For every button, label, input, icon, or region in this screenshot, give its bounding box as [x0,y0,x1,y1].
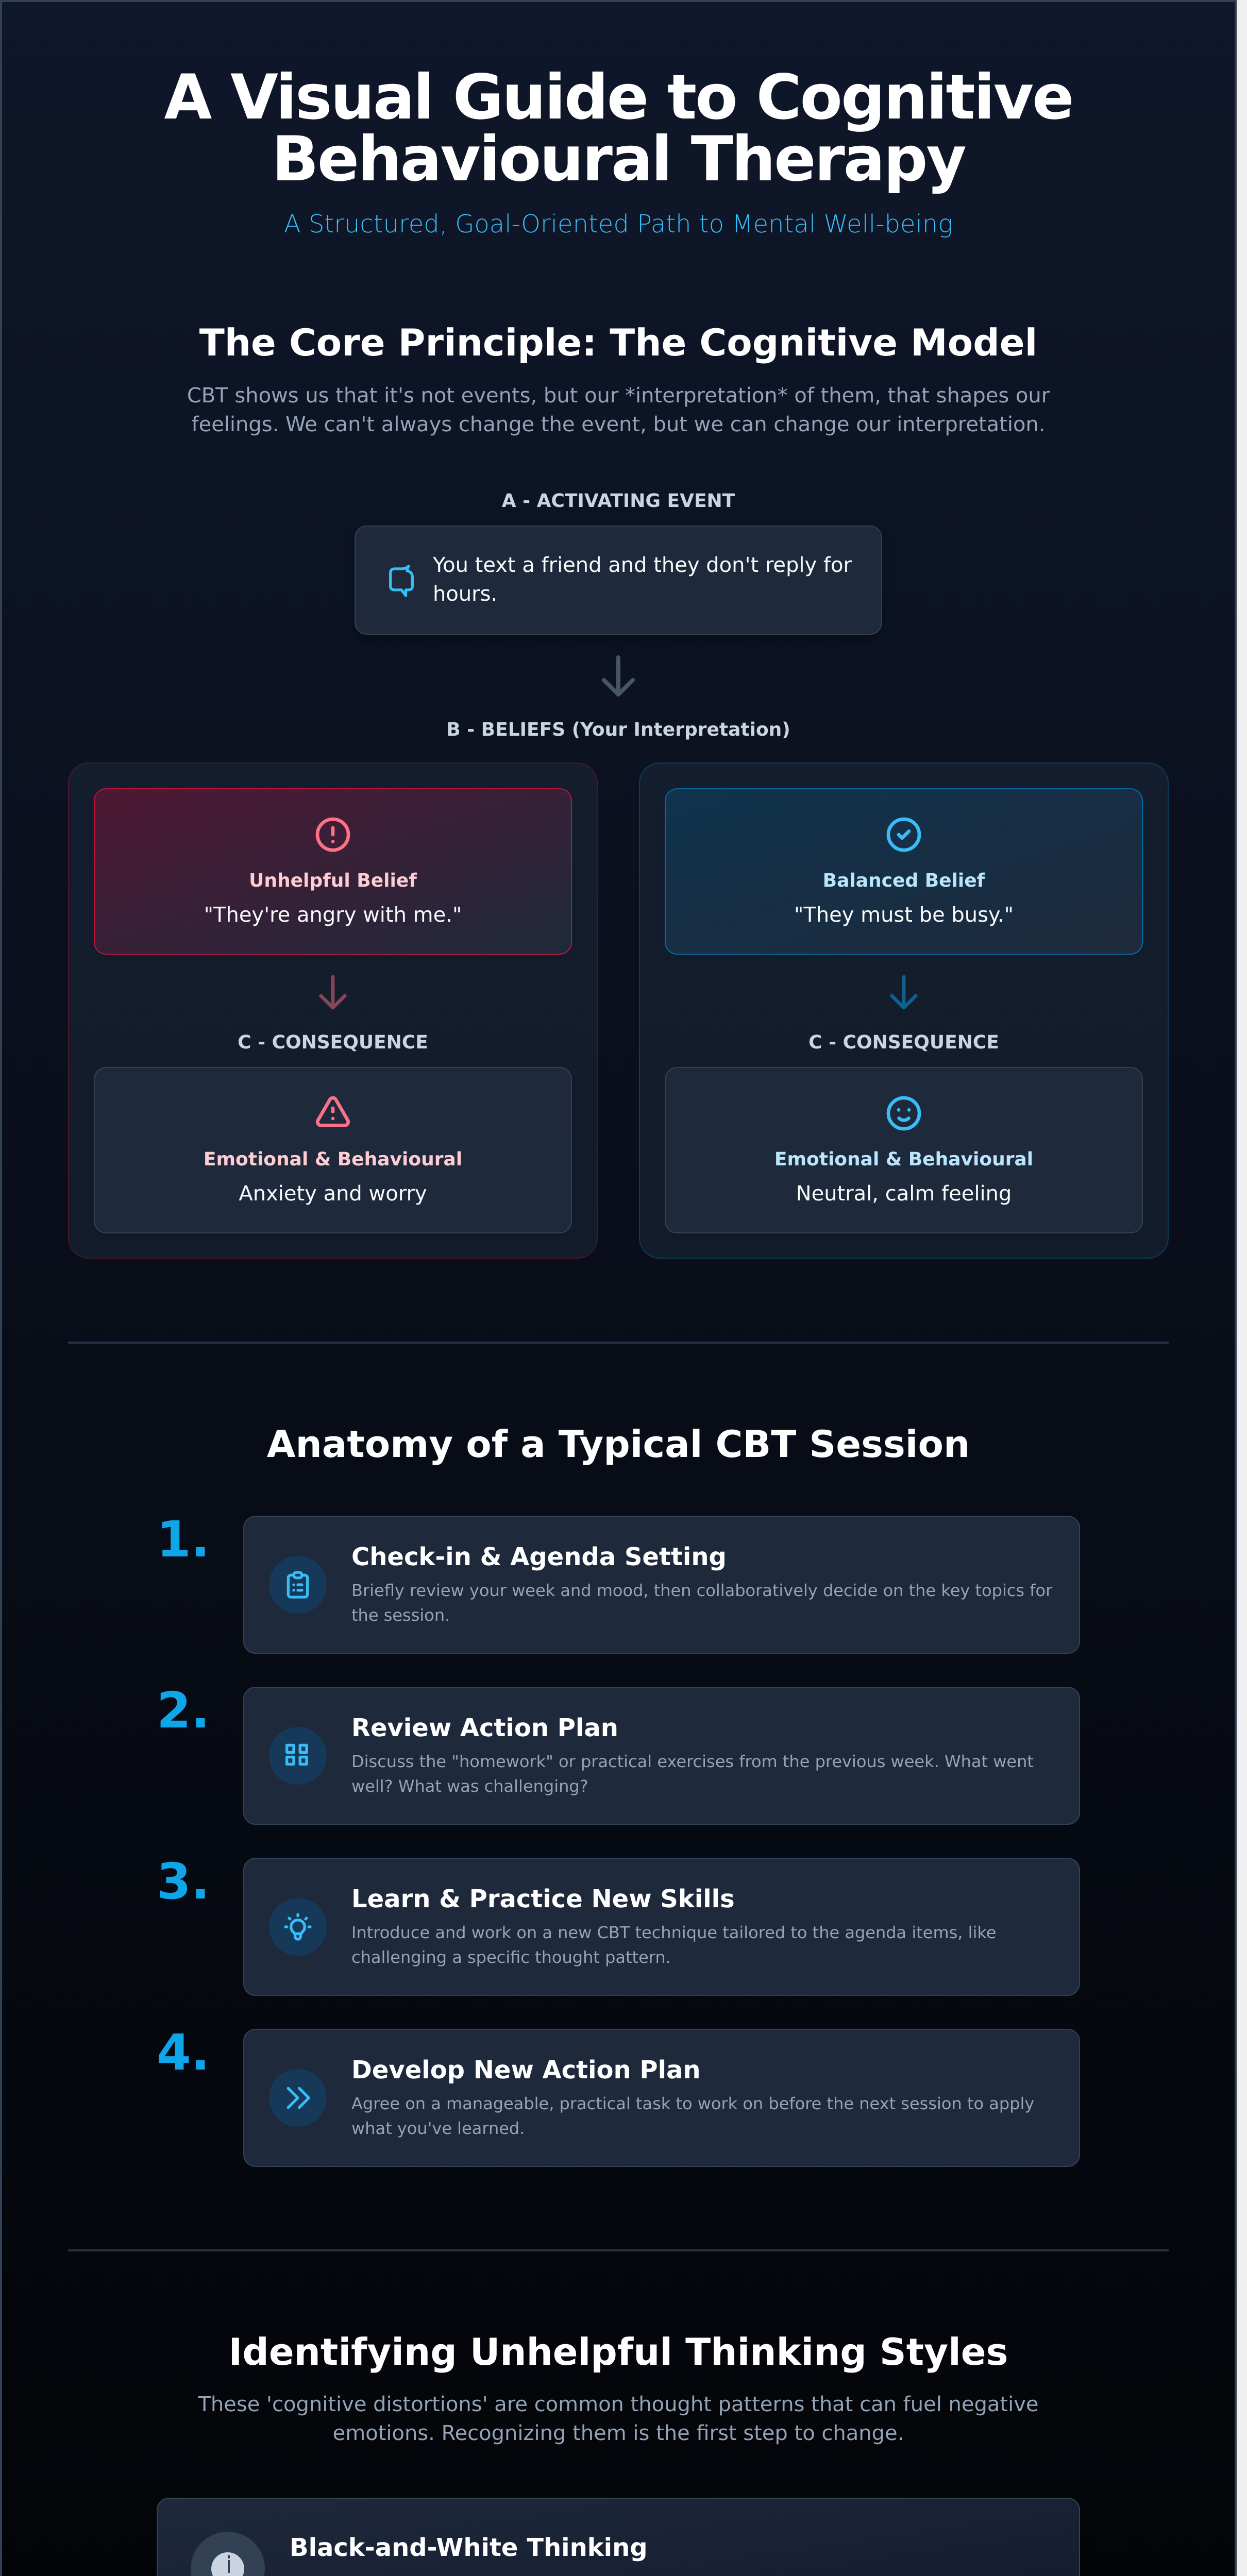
panel: unhelpful path [68,762,598,1259]
step description: challenging a specific thought pattern. [351,1947,671,1967]
card: black-and-white thinking [157,2498,1080,2576]
step title: Develop New Action Plan [351,2056,701,2084]
step description: well? What was challenging? [351,1776,588,1796]
icon: light bulb [269,1898,327,1956]
heading: thinking styles: Identifying Unhelpful Thinking Styles [229,2330,1008,2374]
icon: check circle [886,817,921,852]
step number: 3. [157,1853,210,1910]
consequence heading: Emotional & Behavioural [774,1149,1033,1170]
step description: Briefly review your week and mood, then collaboratively decide on the key topics for [351,1581,1052,1600]
intro text: thinking styles [2,2390,1235,2448]
icon: exclamation circle [315,817,350,852]
title: Behavioural Therapy [272,124,965,195]
intro text: thinking styles: emotions. Recognizing them is the first step to change. [333,2421,904,2445]
step card [243,1858,1080,1996]
consequence box [94,1067,572,1233]
step description [351,1923,996,1967]
step description [351,1581,1052,1625]
event text: You text a friend and they don't reply for [433,553,852,577]
step 3 [157,1853,1080,1996]
intro text: cognitive model: CBT shows us that it's not events, but our *interpretation* of them, that shapes our [187,384,1050,408]
card title: Black-and-White Thinking [290,2533,648,2562]
belief heading: Unhelpful Belief [249,870,417,891]
step description: Discuss the "homework" or practical exercises from the previous week. What went [351,1752,1034,1771]
step 1 [157,1511,1080,1654]
consequence text: Neutral, calm feeling [796,1182,1012,1206]
heading: the core principle: The Core Principle: The Cognitive Model [199,321,1037,364]
step title: Learn & Practice New Skills [351,1885,735,1913]
step number: 4. [157,2024,210,2081]
step number: 2. [157,1682,210,1739]
intro text: cognitive model: feelings. We can't always change the event, but we can change our interpretation. [192,413,1045,436]
icon: chat bubble [389,565,414,597]
event text: hours. [433,582,497,606]
step title: Check-in & Agenda Setting [351,1543,727,1571]
step description [351,1752,1034,1796]
icon: warning triangle [315,1096,350,1127]
label: beliefs: B - BELIEFS (Your Interpretation) [446,719,790,740]
panel: activating event [355,526,882,635]
event text [433,553,852,606]
consequence box [665,1067,1143,1233]
step 4 [157,2024,1080,2167]
icon: double chevron [269,2069,327,2127]
label: consequence: C - CONSEQUENCE [238,1032,428,1053]
panel: balanced path [639,762,1169,1259]
arrow: belief to consequence [319,975,347,1010]
belief heading: Balanced Belief [823,870,985,891]
label: consequence: C - CONSEQUENCE [808,1032,999,1053]
belief quote: "They're angry with me." [204,903,462,927]
icon: clipboard [269,1556,327,1614]
step description: Agree on a manageable, practical task to work on before the next session to apply [351,2094,1034,2113]
belief quote: "They must be busy." [794,903,1014,927]
arrow: belief to consequence [890,975,918,1010]
step card [243,2029,1080,2167]
subtitle: A Structured, Goal-Oriented Path to Mental Well-being [284,210,953,239]
title: A Visual Guide to Cognitive [164,62,1073,133]
step title: Review Action Plan [351,1714,618,1742]
step description: the session. [351,1605,450,1625]
unhelpful belief box [94,788,572,955]
title [164,62,1073,195]
consequence text: Anxiety and worry [239,1182,427,1206]
step card [243,1687,1080,1825]
step description: what you've learned. [351,2119,525,2138]
icon: smiley [886,1096,921,1130]
heading: anatomy of a session: Anatomy of a Typical CBT Session [267,1422,970,1466]
label: activating event: A - ACTIVATING EVENT [502,490,735,512]
intro text: cognitive model [187,384,1050,436]
arrow: event to beliefs [602,655,635,697]
consequence heading: Emotional & Behavioural [204,1149,462,1170]
step card [243,1516,1080,1654]
step description: Introduce and work on a new CBT technique tailored to the agenda items, like [351,1923,996,1942]
icon: grid [269,1727,327,1785]
intro text: thinking styles: These 'cognitive distortions' are common thought patterns that can fuel negative [198,2393,1038,2416]
step 2 [157,1682,1080,1825]
step number: 1. [157,1511,210,1568]
icon: info circle [191,2532,265,2576]
step description [351,2094,1034,2138]
balanced belief box [665,788,1143,955]
